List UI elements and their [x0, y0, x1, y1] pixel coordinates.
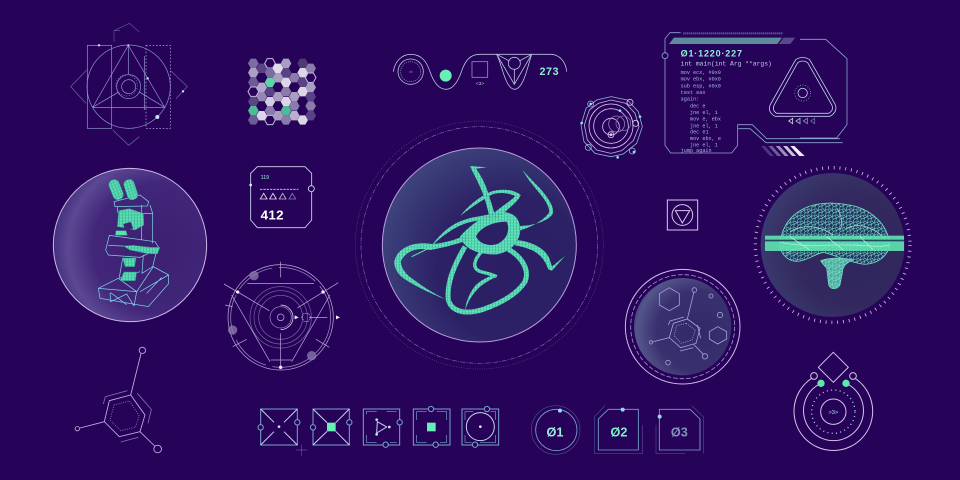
green organism [394, 166, 565, 312]
code text: sub esp, #0x0 [681, 83, 721, 89]
code text: dec e [690, 103, 705, 109]
sphere [634, 278, 731, 375]
code text: jne el, 1 [690, 110, 718, 116]
panel outline [665, 33, 847, 153]
panel: microscope sphere [53, 168, 207, 322]
ring emblem: >3> [828, 410, 839, 416]
badge 02 [594, 406, 643, 454]
honeycomb grid [248, 59, 316, 125]
geometric diagram: circle triangle [71, 23, 187, 145]
small status card: 119 [261, 175, 269, 181]
arrow row [789, 118, 815, 124]
header bars [669, 33, 795, 44]
icon: green dot [440, 70, 452, 82]
code text: jne el, 1 [690, 143, 718, 149]
code text [681, 61, 772, 154]
panel: brain sphere [755, 168, 910, 322]
code text: jne el, 1 [690, 123, 718, 129]
wave strip with icons [393, 54, 567, 89]
code text: jump again [681, 148, 712, 154]
hatch stripes [761, 146, 805, 156]
code text: int main(int Arg **args) [681, 61, 772, 68]
code text: again: [681, 97, 699, 103]
tick ring [755, 168, 910, 322]
icon: square x [258, 409, 307, 456]
scan bar [765, 236, 904, 251]
brain mesh [780, 203, 889, 289]
sphere [382, 148, 576, 342]
icon: dial [398, 59, 423, 84]
target reticle [224, 262, 340, 370]
row of square icons [258, 406, 499, 456]
sphere [53, 168, 207, 322]
sphere [761, 173, 905, 317]
atom orbit diagram [580, 97, 642, 159]
badge 03: Ø3 [671, 425, 688, 439]
badge 01: Ø1 [547, 425, 563, 439]
code text: dec e1 [690, 129, 709, 135]
panel: molecule sphere [625, 269, 740, 384]
code text: mov e, ebx [690, 117, 721, 123]
code panel [662, 33, 847, 156]
icon: ring and dot [462, 406, 499, 447]
code text: mov ecx, #0x0 [681, 70, 721, 76]
icon: square with label [472, 62, 488, 87]
panel: central specimen sphere [355, 121, 603, 369]
benzene molecule [75, 347, 161, 453]
icon: green square [413, 406, 450, 447]
icon: dial: vii [409, 70, 413, 74]
icon: square with label: <3> [476, 81, 484, 87]
badge 03 [656, 406, 703, 454]
code text: test eax [681, 90, 705, 96]
node [662, 53, 668, 59]
icon: square x with green centre [310, 409, 352, 445]
label: 273: 273 [539, 66, 559, 78]
rounded triangle badge [769, 57, 836, 116]
numbered badges [531, 406, 703, 454]
ring emblem [794, 352, 873, 450]
badge 02: Ø2 [611, 425, 627, 439]
molecule lines [649, 288, 727, 365]
dashed ring [631, 275, 735, 379]
heading text: Ø1·1220·227 [681, 49, 743, 59]
code text: mov ebx, #0x0 [681, 77, 721, 83]
small status card: 412 [261, 207, 284, 222]
icon: triangle nodes [363, 409, 402, 447]
small status card [249, 167, 314, 228]
outer rings [355, 121, 603, 369]
panel inner line [738, 129, 843, 143]
icon: triangle badge [667, 200, 698, 230]
badge 01 [531, 406, 580, 454]
ring [625, 269, 740, 384]
microscope [98, 178, 169, 307]
code text: mov ebx, e [690, 136, 721, 142]
icon: inverted triangle [497, 54, 532, 84]
